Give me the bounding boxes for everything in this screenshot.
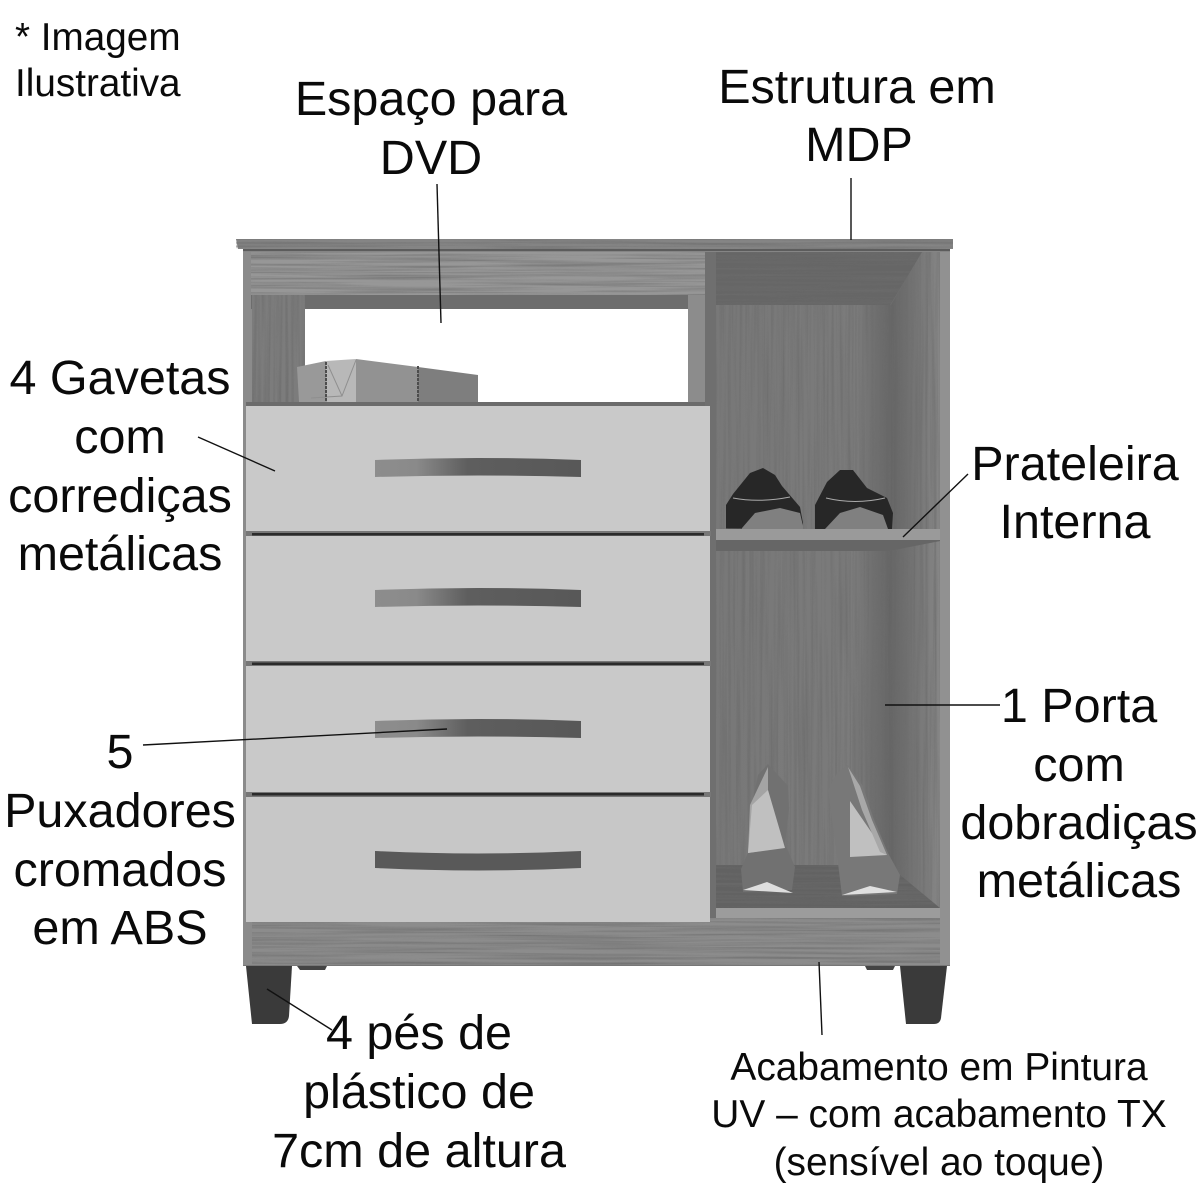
arrow: gavetas — [198, 437, 275, 471]
open compartment back wall — [705, 252, 940, 932]
drawer 2 — [246, 536, 710, 661]
heading: 5 Puxadores: 5 — [107, 725, 133, 779]
drawer gaps — [246, 531, 711, 797]
box in niche — [297, 359, 478, 402]
heading: 5 Puxadores: Puxadores — [4, 784, 236, 838]
drawer 3 — [246, 666, 710, 792]
loafers on shelf — [726, 468, 893, 529]
open DVD niche — [246, 295, 711, 406]
heading: Acabamento: Acabamento em Pintura — [730, 1046, 1148, 1089]
heading: Acabamento: (sensível ao toque) — [774, 1141, 1104, 1184]
heading: Estrutura em MDP: Estrutura em — [718, 60, 996, 114]
arrow: acabamento — [819, 962, 822, 1035]
arrow: MDP — [850, 178, 852, 240]
heading: Acabamento: UV – com acabamento TX — [711, 1093, 1167, 1136]
heading: Estrutura em MDP: MDP — [805, 118, 913, 172]
callout lines — [143, 178, 1000, 1035]
drawer 1 — [246, 406, 710, 531]
note: illustrative image: * Imagem — [15, 16, 181, 59]
arrow: DVD — [437, 184, 441, 323]
heading: 5 Puxadores: cromados — [14, 843, 226, 897]
note: illustrative image: Ilustrativa — [15, 62, 181, 105]
feet — [246, 966, 947, 1024]
arrow: prateleira — [903, 474, 968, 537]
heading: 1 Porta: com — [1033, 738, 1125, 792]
heading: 4 Gavetas: com — [74, 410, 166, 464]
base plinth — [243, 918, 950, 966]
worktop — [236, 239, 953, 252]
heading: Espaço para DVD: DVD — [380, 131, 482, 185]
arrow: porta — [885, 704, 1000, 706]
heading: 4 pés: plástico de — [303, 1065, 535, 1119]
heading: 4 Gavetas: corrediças — [8, 469, 232, 523]
heading: 4 pés: 7cm de altura — [272, 1124, 566, 1178]
heading: Espaço para DVD: Espaço para — [295, 72, 567, 126]
heading: Prateleira Interna: Prateleira — [971, 437, 1179, 491]
heading: 4 Gavetas: metálicas — [18, 527, 222, 581]
high heels on floor — [741, 764, 900, 896]
internal shelf — [716, 529, 940, 551]
header front panel — [251, 252, 705, 309]
heading: 4 Gavetas: 4 Gavetas — [9, 351, 231, 405]
heading: 1 Porta: metálicas — [977, 854, 1181, 908]
drawer 4 — [246, 797, 710, 922]
furniture: chest with drawers and open compartment — [236, 239, 953, 1024]
heading: 1 Porta: dobradiças — [960, 796, 1198, 850]
compartment floor — [716, 865, 940, 918]
arrow: puxadores — [143, 729, 447, 745]
body side panels — [243, 250, 950, 966]
heading: 1 Porta: 1 Porta — [1001, 679, 1157, 733]
arrow: pés — [267, 989, 332, 1030]
heading: 4 pés: 4 pés de — [326, 1006, 512, 1060]
heading: 5 Puxadores: em ABS — [32, 901, 208, 955]
heading: Prateleira Interna: Interna — [1000, 495, 1151, 549]
